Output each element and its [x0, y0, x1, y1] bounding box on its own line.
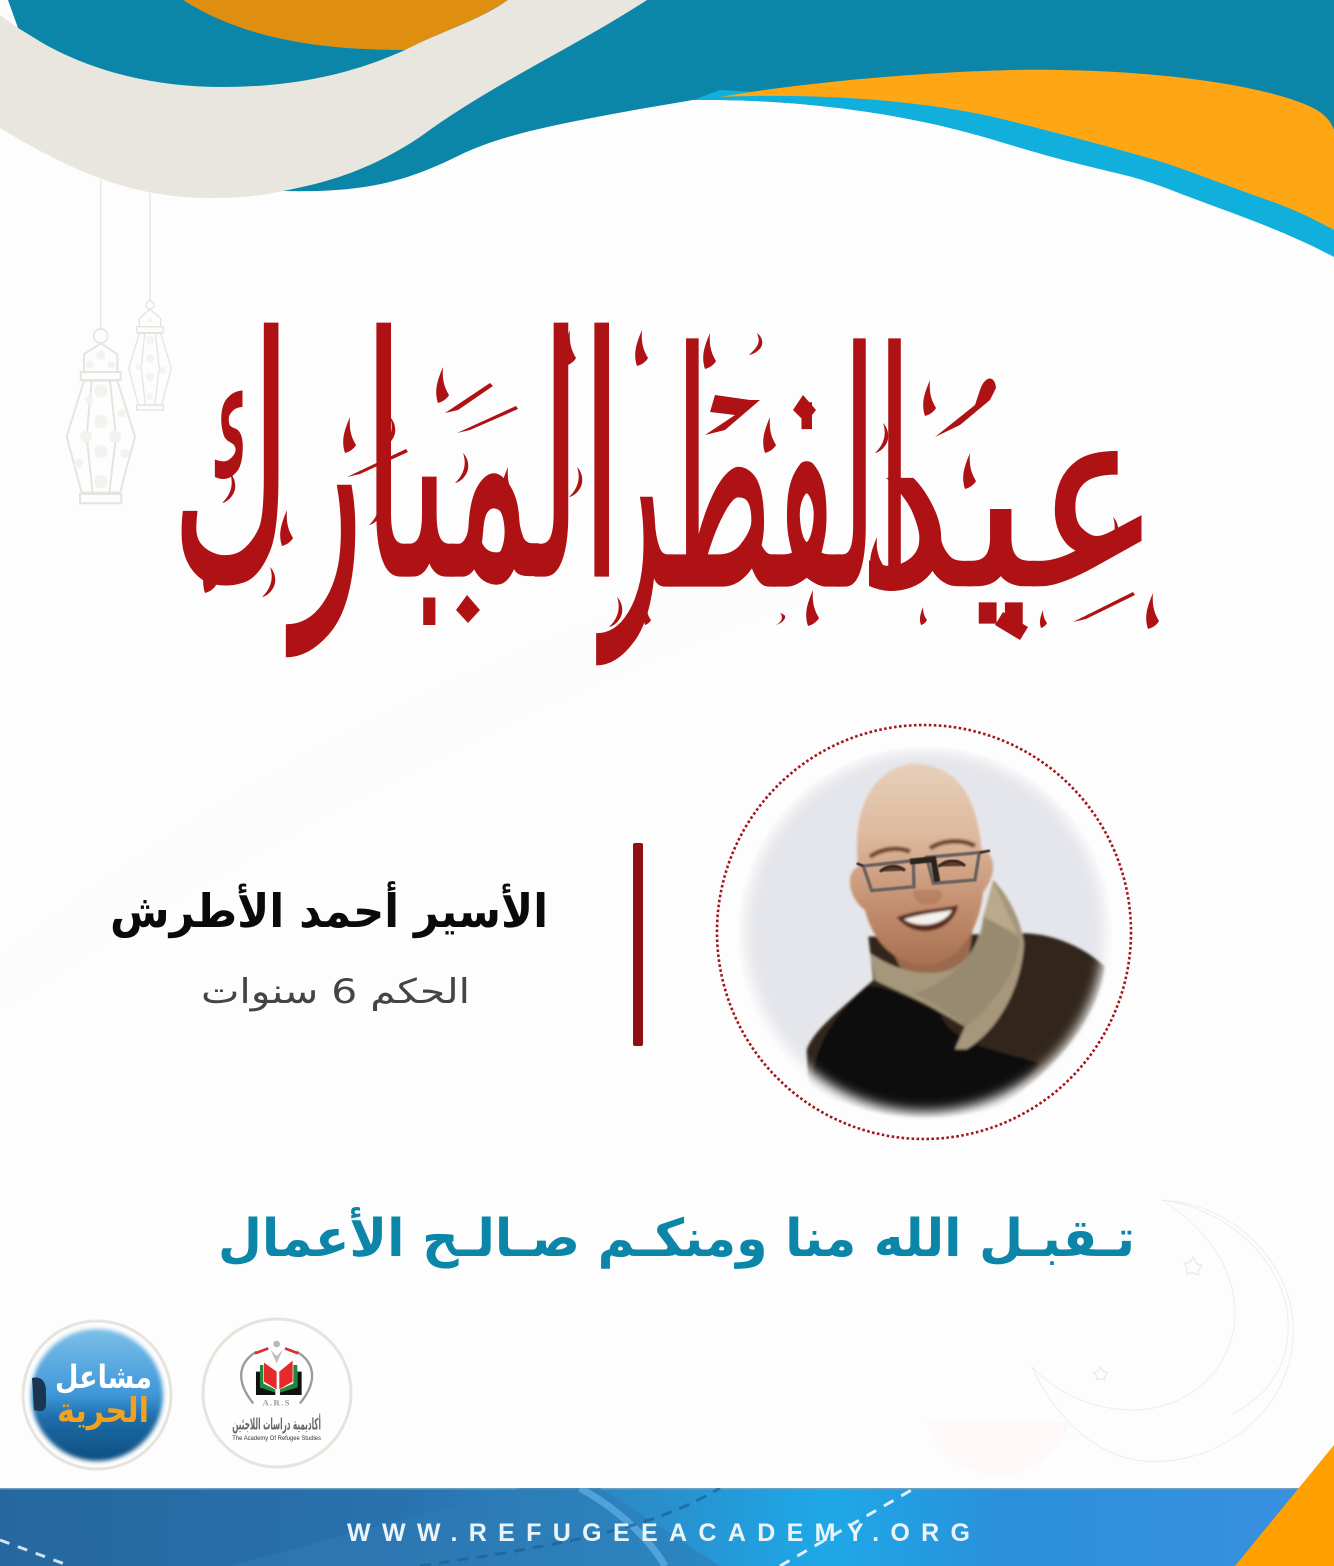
greeting line: تـقبـل الله منا ومنكـم صـالـح الأعمال: [218, 1206, 1135, 1269]
icon: small lantern: [129, 193, 171, 410]
faint background swoosh: [0, 560, 800, 1010]
icon: star: [1094, 1367, 1108, 1380]
word: al-Mubarak: المبارك: [172, 270, 622, 658]
word: al-Fitr: الفطر: [596, 288, 912, 665]
eyes: [880, 861, 965, 872]
faint pink semicircle: [927, 1422, 1070, 1475]
cyan wave: [693, 90, 1334, 257]
laurel arch: [241, 1352, 312, 1403]
neck: [894, 930, 974, 974]
teal wave: [8, 0, 1334, 191]
dotted photo ring: [717, 725, 1131, 1139]
title calligraphy: Eid al-Fitr greeting: [172, 270, 1162, 665]
top wave header: [0, 0, 1334, 300]
logo: Mashaal al-Hurriya: [23, 1321, 171, 1469]
head: [850, 763, 993, 965]
vertical divider: [633, 843, 643, 1046]
logo title: مشاعل: [55, 1358, 152, 1396]
academy English name: The Academy Of Refugee Studies: [232, 1436, 321, 1442]
scarf: [870, 880, 1024, 1049]
portrait: [738, 747, 1112, 1120]
book: [256, 1372, 302, 1395]
orange corner triangle: [1235, 1445, 1334, 1566]
profile photo: [717, 725, 1131, 1139]
dark orange wave: [183, 0, 508, 50]
prisoner name: الأسير أحمد الأطرش: [110, 881, 548, 938]
logo: Academy of Refugee Studies: [203, 1319, 351, 1467]
orange wave: [720, 70, 1334, 230]
lanterns: [67, 180, 171, 503]
glasses: [857, 851, 990, 891]
website address: WWW.REFUGEEACADEMY.ORG: [347, 1519, 970, 1547]
ornament: calligraphic marks: [203, 330, 1159, 629]
photo backdrop: [742, 749, 1108, 1070]
nose shadow: [913, 890, 942, 905]
logo: Academy of Refugee Studies: أكاديمية دراسات اللاجئين: [232, 1413, 321, 1433]
cream wave: [0, 0, 647, 198]
mouth: [897, 905, 958, 931]
logo subtitle: الحرية: [57, 1391, 149, 1431]
crescent watermark: [1032, 1200, 1293, 1462]
icon: star: [1184, 1257, 1202, 1275]
footer band: [0, 1488, 1334, 1566]
sentence text: الحكم 6 سنوات: [201, 972, 470, 1012]
sweater: [807, 933, 1105, 1118]
brows: [870, 841, 975, 857]
white area under the right wave: [693, 100, 1334, 300]
word: Eid: عيد: [857, 350, 1162, 646]
initials: A.R.S: [262, 1398, 291, 1408]
icon: large lantern: [67, 180, 135, 503]
